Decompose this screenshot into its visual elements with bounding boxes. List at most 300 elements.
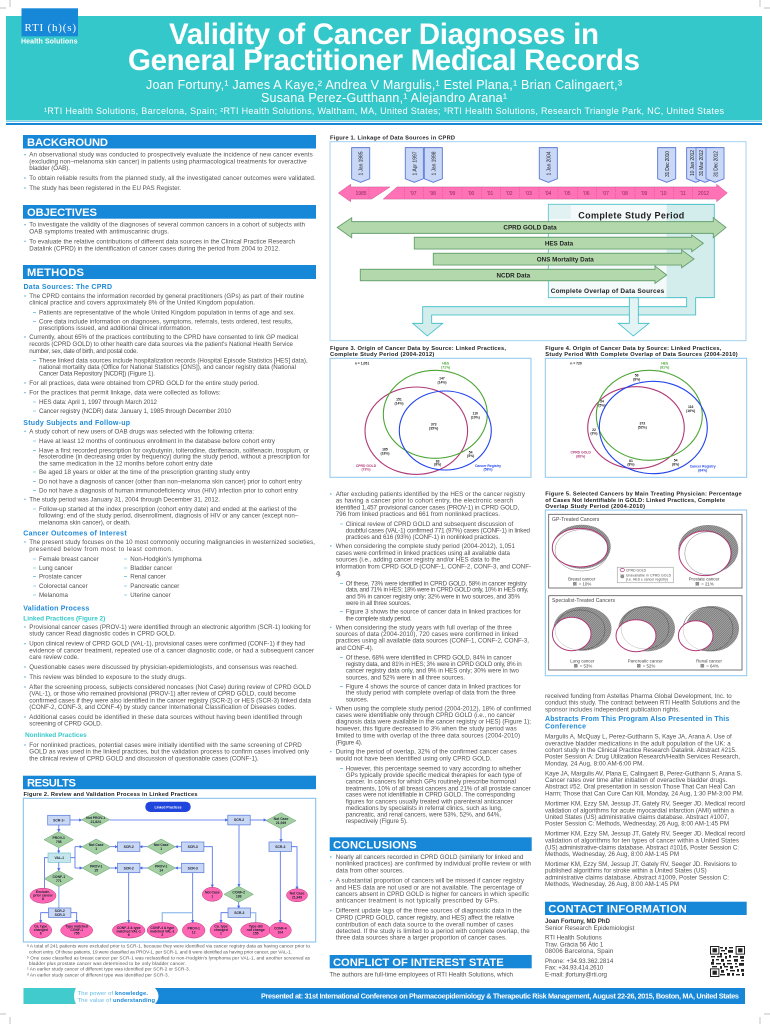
text: results narrative: and 5% in cancer registry only; 32% were in two sources, and 35% [346, 593, 520, 600]
text: contact details: Senior Research Epidemiologist [545, 925, 635, 932]
pin date labels: 1 Jan 1998 [432, 151, 438, 176]
timeline year labels: '09 [641, 191, 647, 197]
text: results narrative: Figure 3 shows the source of cancer data in linked practices for [346, 609, 521, 616]
nodes: process boxes: SCR-3 [234, 911, 244, 915]
text: conclusions bullets: contribution of each data source to the overall number of cases [336, 921, 513, 928]
venn labels: 373 [431, 423, 437, 427]
text: conclusions bullets: anticancer treatment is not typically prescribed by GPs. [336, 898, 499, 905]
figure 3: venn diagram [330, 358, 531, 477]
figure 5 title [545, 492, 742, 510]
icon: QR code [710, 946, 745, 977]
text: results narrative: Figure 4 shows the source of cancer data in linked practices for [346, 683, 521, 690]
nodes: outcome ovals: CONF-3 & type [117, 926, 141, 930]
title: General Practitioner Medical Records [128, 44, 640, 77]
nodes: process boxes: SCR-2 [55, 909, 65, 913]
data source arrows: HES Data [545, 240, 574, 247]
text: linked practices: care review code. [29, 654, 79, 661]
panel: objectives [23, 205, 316, 252]
text: results narrative: practices using all available data sources (CONF-1, CONF-2, CONF-3, [336, 638, 529, 645]
nodes: process boxes: VAL-1 [55, 856, 64, 860]
complete study period region [413, 204, 714, 336]
nodes: outcome ovals: PROV-1 [187, 927, 200, 931]
text: study subjects: Be aged 18 years or older at the time of the prescription granting study entry [39, 469, 251, 476]
venn labels: 56 [635, 374, 639, 378]
arrow: CPRD GOLD data [337, 218, 726, 238]
text: abstracts list: Poster Session C: Methods, Wednesday, 26 Aug, 8:00 AM-1:45 PM [545, 821, 729, 828]
prostate cancer circles: = 21% [701, 582, 714, 586]
text: conclusions bullets: cancers absent in CPRD GOLD is higher for cancers in which specific [336, 891, 529, 898]
text: study subjects: The study period was January 31, 2004 through December 31, 2012. [29, 496, 220, 503]
text: results narrative: the complete study period. [346, 615, 412, 622]
text: results narrative: When considering the complete study period (2004-2012), 1,051 [336, 543, 516, 550]
text: nonlinked practices: the clinical review of CPRD GOLD and discussion of questionable cases (CONF-1). [29, 755, 259, 762]
figure 4 title: Figure 4. Origin of Cancer Data by Source: Linked Practices, [545, 346, 722, 352]
nodes: outcome ovals: not change [247, 928, 265, 932]
nodes: decision diamonds: 798 [56, 840, 62, 844]
nodes: outcome ovals: matched VAL-1 [150, 930, 175, 934]
text: abstracts list: Harm; Those that Can Cure Can Kill, Monday, 24 Aug, 1:30 PM-3:00 PM. [545, 790, 744, 797]
heading: objectives [23, 205, 316, 219]
arrow: NCDR data [360, 266, 667, 283]
text: study subjects: following: end of the study period, disenrollment, diagnosis of HIV or any cancer (except non– [39, 513, 299, 520]
text: results narrative: limited to time with overlap of the three data sources (2004-2010) [336, 732, 520, 739]
text: results narrative: However, this percentage seemed to vary according to whether [346, 765, 521, 772]
text: results narrative: diagnosis data were available in the cancer registry or HES) (Figure 1); [336, 719, 531, 726]
nodes: process boxes: SCR-3 [188, 845, 198, 849]
nodes: outcome ovals: 104 [277, 931, 283, 935]
pin date labels: 31 Dec 2012 [713, 151, 719, 177]
text: study subjects [24, 428, 310, 526]
text: cancer outcomes: Melanoma [39, 592, 69, 599]
renal cancer circles: Renal cancer [696, 658, 722, 664]
venn labels: (84%) [698, 469, 707, 473]
text: data sources: The CPRD contains the information recorded by general practitioners (GPs) as part of their routine [29, 293, 305, 300]
text: abstracts list: validation of algorithms for ten types of cancer within a United States [545, 838, 739, 845]
nodes: decision diamonds: 14 [159, 868, 163, 872]
text: abstracts list: published algorithms for stroke within a United States (US) [545, 868, 707, 875]
text: results narrative: treatments, 10% of all breast cancers and 21% of all prostate cancer [346, 785, 531, 792]
text: results narrative: After excluding patients identified by the HES or the cancer registry [336, 491, 526, 498]
text: data sources: clinical practice and covers approximately 8% of the United Kingdom population. [29, 300, 255, 307]
text: results narrative: cancer. In cancers for which GPs routinely prescribe hormonal [346, 779, 516, 786]
text: study subjects: Have at least 12 months of continuous enrollment in the database before cohort entry [39, 438, 276, 445]
heading: contact information [545, 902, 747, 916]
node: linked practices start [145, 802, 191, 812]
nodes: outcome ovals: 8 [42, 897, 44, 901]
text: results narrative: registry data, and 81% in HES; 3% were in CPRD GOLD only, 8% in [346, 661, 522, 668]
legend: CPRD GOLD [626, 568, 647, 572]
text: results narrative: sources, and 52% were in all three sources. [346, 674, 465, 681]
text: linked practices: study cancer Read diagnostic codes in CPRD GOLD. [29, 631, 176, 638]
panel: GP-treated cancers [549, 514, 742, 588]
nodes: outcome ovals: Ca. type [34, 925, 47, 929]
pin date labels: 31 Mar 2012 [699, 150, 705, 176]
venn labels: Cancer Registry [690, 465, 716, 469]
tagline [74, 988, 158, 1004]
nodes: process boxes [48, 815, 291, 917]
figure 5 title: Overlap Study Period (2004-2010) [545, 504, 645, 510]
data source arrows: ONS Mortality Data [537, 256, 594, 263]
text: study subjects: Do not have a diagnosis of human immunodeficiency virus (HIV) infection prior to cohort entry [39, 487, 299, 494]
venn labels: (8%) [627, 463, 635, 467]
timeline year labels: '11 [680, 191, 686, 197]
text: study subjects: fesoterodine (in decreasing order by frequency) during the study period, without a prescription for [39, 454, 310, 461]
venn labels: 373 [639, 422, 645, 426]
text: data sources [24, 293, 308, 415]
text: figure 2 footnotes: ᵈ An earlier study cancer of different type was identified per SCR-3. [27, 972, 169, 977]
timeline year labels: '07 [602, 191, 609, 197]
node: linked practices start: Linked Practices [155, 805, 182, 809]
text: cancer outcomes: Female breast cancer [39, 556, 99, 563]
text: objectives bullets: To evaluate the relative contributions of different data sources in the Clinical Practice Research [29, 238, 296, 245]
nodes: outcome ovals: Type matched [65, 925, 88, 929]
nodes: process boxes: SCR-3 [188, 866, 198, 870]
text: results narrative: 796 from linked practices and 661 from nonlinked practices. [336, 511, 500, 518]
presented at line: Presented at: 31st International Conference on Pharmacoepidemiology & Therapeutic Risk Management, August 22-26, 2015, Boston, MA, United States [261, 992, 739, 1000]
heading: conclusions: CONCLUSIONS [333, 839, 417, 851]
complete study period region: Complete Overlap of Data Sources [551, 288, 665, 295]
text: conclusions bullets: Nearly all cancers recorded in CPRD GOLD (similarly for linked and [336, 854, 524, 861]
text: abstracts list: Cancer rates over time after initiation of overactive bladder drugs. [545, 777, 728, 784]
text: background bullets: bladder (OAB). [29, 165, 70, 172]
text: linked practices [24, 624, 314, 728]
nodes: outcome ovals: 12 [192, 931, 196, 935]
text: study subjects: Have a first recorded prescription for oxybutynin, tolterodine, darifenacin, solifenacin, trospium, or [39, 447, 309, 454]
text: cancer outcomes: Uterine cancer [130, 592, 171, 599]
text: conclusions bullets: Different update lags of the three sources of diagnostic data in the [336, 908, 522, 915]
nodes: decision diamonds [44, 812, 296, 902]
text: results narrative: would not have been identified using only CPRD GOLD. [335, 756, 492, 763]
text: objectives bullets [24, 222, 306, 252]
pancreatic cancer circles: = 52% [643, 664, 655, 668]
renal cancer circles: = 64% [706, 664, 719, 668]
lung cancer circles: = 53% [580, 664, 592, 668]
figure 1 title: Figure 1. Linkage of Data Sources in CPRD [330, 136, 455, 142]
heading: conclusions [330, 837, 532, 851]
timeline year labels: '05 [564, 191, 571, 197]
pin date labels: 1 Apr 1997 [412, 151, 418, 176]
heading: background: BACKGROUND [27, 137, 108, 149]
text: abstracts list: Mortimer KM, Ezzy SM, Jessup JT, Gately RV, Seeger JD. Medical record [545, 800, 746, 807]
venn labels: HES [442, 361, 450, 365]
text: linked practices: Upon clinical review of CPRD GOLD (VAL-1), provisional cases were confirmed (CONF-1) if they had [29, 641, 306, 648]
text: abstracts list: overactive bladder medications in the adult population of the UK: a [545, 740, 731, 747]
lung cancer circles: Lung cancer [570, 658, 595, 664]
venn labels: 185 [382, 448, 388, 452]
panel: specialist-treated cancers: Specialist-Treated Cancers [552, 598, 616, 604]
pancreatic cancer circles: Pancreatic cancer [628, 658, 663, 664]
renal cancer circles [678, 606, 739, 668]
text: conclusions bullets [330, 854, 532, 942]
text: results narrative: 4). [336, 570, 341, 577]
affiliations: ¹RTI Health Solutions, Barcelona, Spain; ²RTI Health Solutions, Waltham, MA, United States; ³RTI Health Solutions, Research Triangle Park, NC, United States [44, 106, 724, 116]
nodes: outcome ovals: 155 [253, 932, 259, 936]
venn labels: (8%) [672, 462, 679, 466]
date pins [352, 148, 724, 182]
venn labels: (8%) [434, 463, 441, 467]
nodes: process boxes: SCR-1ᵃ [53, 818, 65, 822]
text: results narrative: During the period of overlap, 32% of the confirmed cancer cases [336, 749, 517, 756]
header banner [6, 8, 762, 125]
logo: RTI Health Solutions [21, 8, 78, 46]
nodes: outcome ovals: Not Case [205, 891, 220, 895]
heading: contact information: CONTACT INFORMATION [548, 904, 687, 916]
timeline year labels: '98 [429, 191, 436, 197]
authors: Joan Fortuny,¹ James A Kaye,² Andrea V Margulis,¹ Estel Plana,¹ Brian Calingaert,³ [146, 78, 622, 92]
text: linked practices: Questionable cases were discussed by physician-epidemiologists, and consensus was reached. [29, 664, 298, 671]
text: abstracts list: Methods, Wednesday, 26 Aug, 8:00 AM-1:45 PM [545, 881, 679, 888]
text: contact details: Trav. Gràcia 56 Àtic 1 [545, 941, 604, 948]
text: data sources: Core data include information on diagnoses, symptoms, referrals, tests ordered, test results, [39, 319, 293, 326]
text: results narrative: however, this figure decreased to 3% when the study period was [336, 726, 517, 733]
text: results narrative: sources. [346, 696, 369, 703]
venn labels: (5%) [598, 403, 606, 407]
arrow: HES data [414, 235, 703, 252]
text: linked practices: screening of CPRD GOLD. [29, 721, 103, 728]
nodes: decision diamonds: PROV-1 [90, 864, 103, 868]
text: conflict statement: conduct this study. The contract between RTI Health Solutions and the [545, 700, 741, 707]
figure 4 title [545, 346, 738, 358]
venn labels: n = 720 [570, 361, 582, 365]
venn labels: (14%) [437, 380, 447, 384]
figure 5: cancers by treating physician [545, 510, 747, 676]
text: results narrative: cases were identifiable only through CPRD GOLD (i.e., no cancer [336, 712, 515, 719]
text: results narrative: GPs typically provide specific medical therapies for each type of [346, 772, 522, 779]
nodes: process boxes: SCR-3 [55, 913, 65, 917]
venn labels: n = 1,051 [355, 361, 369, 365]
venn labels: (73%) [361, 468, 371, 472]
nodes: decision diamonds: Not Case [89, 843, 104, 847]
figure 3 title: Complete Study Period (2004-2012) [330, 352, 434, 358]
text: figure 2 footnotes: ᵇ One case classified as breast cancer per SCR-1 was reclassified to non-Hodgkin's lymphoma per VAL-1, and another screened as [27, 955, 311, 960]
heading: conflict of interest: CONFLICT OF INTEREST STATE [333, 957, 504, 969]
venn labels: (52%) [638, 426, 647, 430]
text: contact details: RTI Health Solutions [545, 935, 602, 942]
text: figure 2 footnotes: bladder plus prostate cancer was determined to be only bladder cancer. [29, 961, 186, 966]
text: results narrative: Of these, 73% were identified in CPRD GOLD, 58% in cancer registry [346, 580, 528, 587]
text: background bullets [24, 152, 316, 192]
nodes: outcome ovals: 6 [40, 932, 42, 936]
pin date labels: 10 Jan 2012 [690, 150, 696, 176]
nodes: outcome ovals: CONF-1 [70, 928, 83, 932]
text: conclusions bullets: and HES data are not used or are not available. The percentage of [336, 884, 522, 891]
venn labels: 54 [469, 450, 473, 454]
text: results narrative: as having a cancer prior to cohort entry, the electronic search [336, 498, 514, 505]
text: results narrative [330, 491, 532, 825]
text: results narrative: respectively (Figure 5). [346, 818, 408, 825]
text: results narrative: When considering the study years with full overlap of the three [336, 624, 512, 631]
subheading: cancer outcomes: Cancer Outcomes of Interest [23, 530, 127, 538]
text: background bullets: An observational study was conducted to prospectively evaluate the incidence of new cancer events [29, 152, 313, 159]
text: objectives bullets: Datalink (CPRD) in the identification of cancer cases during the period from 2004 to 2012. [29, 245, 280, 252]
subheading: abstracts from this program: Conference [545, 723, 586, 730]
text: data sources: These linked data sources include hospitalization records (Hospital Episode Statistics [HES] data), [39, 357, 308, 364]
venn labels: (14%) [394, 401, 404, 405]
text: abstracts list: Kaye JA, Margulis AV, Plana E, Calingaert B, Perez-Gutthann S, Arana S. [545, 770, 743, 777]
figure 2: flowchart [23, 798, 316, 942]
nodes: outcome ovals: matched VAL-1 [116, 930, 141, 934]
subheading: linked practices: Linked Practices (Figure 2) [23, 616, 105, 622]
authors [146, 78, 622, 105]
text: conflict statement: received funding from Astellas Pharma Global Development, Inc. to [545, 693, 732, 700]
nodes: outcome ovals: prior cancer [33, 894, 53, 898]
text: abstracts list [545, 733, 746, 888]
pin date labels: 1 Jan 1985 [358, 151, 364, 176]
breast cancer circles [552, 525, 611, 586]
nodes: process boxes: SCR-2 [124, 845, 134, 849]
text: cancer outcomes: Renal cancer [130, 574, 166, 581]
panel: GP-treated cancers: GP-Treated Cancers [552, 517, 600, 523]
text: abstracts list: Methods, Wednesday, 26 Aug, 8:00 AM-1:45 PM [545, 851, 679, 858]
venn labels: (81%) [660, 366, 669, 370]
nodes: outcome ovals: Type did [249, 925, 263, 929]
text: cancer outcomes: Bladder cancer [130, 565, 172, 572]
pin date labels [358, 150, 719, 177]
figure 3 title: Figure 3. Origin of Cancer Data by Source: Linked Practices, [330, 346, 506, 352]
text: cancer outcomes: The present study focuses on the 10 most commonly occuring malignancies in westernized societies, [29, 539, 315, 546]
text: background bullets: The study has been registered in the EU PAS Register. [29, 185, 181, 192]
subheading: validation process: Validation Process [23, 605, 89, 612]
text: conclusions bullets: three data sources share a larger proportion of cancer cases. [336, 935, 507, 942]
venn labels: 83 [436, 459, 440, 463]
text: conflict statement: The authors are full-time employees of RTI Health Solutions, which [329, 972, 514, 979]
venn labels: (10%) [471, 415, 480, 419]
venn labels: (8%) [633, 377, 640, 381]
venn labels: (3%) [590, 432, 598, 436]
text: conclusions bullets: CPRD (CPRD GOLD, cancer registry, and HES) affect the relative [336, 915, 515, 922]
nodes: outcome ovals: Exclude, [36, 890, 50, 894]
text: abstracts list: Mortimer KM, Ezzy SM, Jessup JT, Gately RV, Seeger JD. Medical record [545, 831, 746, 838]
nodes: decision diamonds: 21,949 [276, 821, 286, 825]
nodes: outcome ovals: 755 [74, 932, 80, 936]
venn labels: (5%) [467, 454, 474, 458]
text: cancer outcomes: Pancreatic cancer [130, 583, 179, 590]
text: study subjects: Follow-up started at the index prescription (cohort entry date) and ended at the earliest of the [39, 506, 297, 513]
text: abstracts list: administrative claims database. Abstract #1009, Poster Session C: [545, 874, 729, 881]
text: figure 2 footnotes [27, 943, 311, 977]
venn labels: (68%) [576, 455, 585, 459]
tagline: The power of knowledge. [78, 991, 148, 997]
text: data sources: For all practices, data were obtained from CPRD GOLD for the entire study period. [29, 380, 259, 387]
text: conflict statement [329, 693, 741, 979]
text: linked practices: This review was blinded to exposure to the study drugs. [29, 674, 186, 681]
text: results narrative: the study period with complete overlap of data from the three [346, 690, 516, 697]
logo: RTI Health Solutions: Health Solutions [21, 38, 78, 46]
text: objectives bullets: OAB symptoms treated with antimuscarinic drugs. [29, 229, 169, 236]
text: results narrative: doubtful cases (VAL-1) confirmed 771 (97%) cases (CONF-1) in linked [346, 528, 531, 535]
text: linked practices: Provisional cancer cases (PROV-1) were identified through an electronic algorithm (SCR-1) looking for [29, 624, 311, 631]
venn labels: CPRD GOLD [571, 451, 591, 455]
panel: conflict of interest [329, 693, 741, 979]
heading: background [23, 135, 316, 149]
subheading: nonlinked practices: Nonlinked Practices [25, 732, 87, 739]
text: nonlinked practices [24, 742, 310, 762]
text: contact details: 08006 Barcelona, Spain [545, 948, 614, 955]
subheading: study subjects: Study Subjects and Follow-up [23, 420, 130, 427]
figure 4: venn diagram [545, 358, 747, 477]
authors: Susana Perez-Gutthann,¹ Alejandro Arana¹ [261, 91, 507, 105]
nodes: outcome ovals: CONF-4 [274, 927, 287, 931]
panel: background [23, 135, 316, 192]
timeline year labels: '03 [525, 191, 532, 197]
nodes: decision diamonds: 1 [160, 847, 162, 851]
timeline year labels: '02 [506, 191, 513, 197]
text: results narrative: When using the complete study period (2004-2012), 18% of confirmed [336, 705, 532, 712]
pin date labels: 1 Jan 2004 [546, 151, 552, 176]
venn labels: HES [661, 361, 669, 365]
text: results narrative: sources of data (2004-2010), 720 cases were confirmed in linked [336, 631, 519, 638]
text: contact details: Phone: +34.93.362.2814 [545, 958, 614, 965]
venn labels: (16%) [686, 409, 695, 413]
nodes: decision diamonds: 771 [56, 879, 62, 883]
venn labels: 34 [600, 400, 604, 404]
panel: specialist-treated cancers [549, 596, 742, 670]
text: results narrative: cases were confirmed in linked practices using all available data [336, 550, 511, 557]
data source arrows: CPRD GOLD Data [503, 224, 557, 232]
tagline: The value of understanding [78, 998, 155, 1004]
lung cancer circles [552, 607, 612, 668]
text: contact details: Joan Fortuny, MD PhD [545, 918, 611, 925]
nodes: outcome ovals: changed [34, 928, 48, 932]
nodes: outcome ovals: 6 [128, 933, 130, 937]
text: cancer outcomes: Colorectal cancer [39, 583, 88, 590]
legend: Unavailable in CPRD GOLD [626, 573, 672, 577]
venn labels [570, 361, 716, 473]
arrow: ONS mortality data [433, 250, 694, 268]
timeline year labels: '97 [410, 191, 417, 197]
text: background bullets: (excluding non–melanoma skin cancer) in patients using pharmacological treatments for overactive [29, 158, 307, 165]
panel: conclusions [330, 837, 532, 942]
timeline year labels: 2012 [698, 191, 709, 197]
nodes: decision diamonds: 1 [95, 847, 97, 851]
text: conclusions bullets: detected. If the study is limited to a period with complete overlap, the [336, 928, 530, 935]
nodes: process boxes: SCR-2 [124, 866, 134, 870]
nodes: outcome ovals: 2 [161, 933, 163, 937]
text: contact details: Fax: +34.93.414.2610 [545, 965, 604, 972]
venn labels: 61 [629, 459, 633, 463]
text: data sources: number, sex, date of birth, and postal code. [29, 348, 138, 355]
footer banner [24, 988, 745, 1004]
text: conclusions bullets: data from other sources. [336, 868, 404, 875]
text: results narrative: Of these, 68% were identified in CPRD GOLD, 84% in cancer [346, 654, 512, 661]
text: results narrative: (Figure 4). [336, 739, 363, 746]
text: results narrative: pancreatic, and renal cancers, were 53%, 52%, and 64%, [346, 811, 501, 818]
text: data sources: For the practices that permit linkage, data were collected as follows: [29, 390, 221, 397]
venn labels: (18%) [380, 452, 390, 456]
heading: results: RESULTS [27, 778, 77, 790]
timeline year labels: '04 [545, 191, 551, 197]
timeline year labels: '08 [621, 191, 628, 197]
venn labels: 116 [688, 405, 694, 409]
venn labels: (71%) [441, 365, 450, 369]
text: data sources: Currently, about 65% of the practices contributing to the CPRD have consented to link GP medical [29, 334, 298, 341]
text: objectives bullets: To investigate the validity of the diagnoses of several common cancers in a cohort of subjects with [29, 222, 306, 229]
heading: methods: METHODS [27, 267, 85, 279]
timeline year labels: 1985 [355, 191, 367, 197]
legend: (i.e. HES ± cancer registry) [626, 577, 668, 581]
heading: methods [23, 265, 316, 279]
figure 4 title: Study Period With Complete Overlap of Data Sources (2004-2010) [545, 352, 738, 358]
text: linked practices: Additional cases could be identified in these data sources without having been identified through [29, 714, 303, 721]
text: data sources: national mortality data (Office for National Statistics [ONS]), and cancer registry data (National [39, 364, 296, 371]
text: abstracts list: Margulis A, McQuay L, Perez-Gutthann S, Kaye JA, Arana A. Use of [545, 733, 732, 740]
text: abstracts list: (US) administrative-claims database. Abstract #1016, Poster Session C: [545, 844, 739, 851]
heading: results [23, 776, 316, 790]
venn labels: Cancer Registry [475, 464, 501, 468]
nodes: decision diamonds: 188 [236, 895, 242, 899]
text: data sources: prescriptions issued, and additional clinical information. [39, 325, 192, 332]
text: results narrative: medications by specialists in referral clinics, such as lung, [346, 805, 503, 812]
